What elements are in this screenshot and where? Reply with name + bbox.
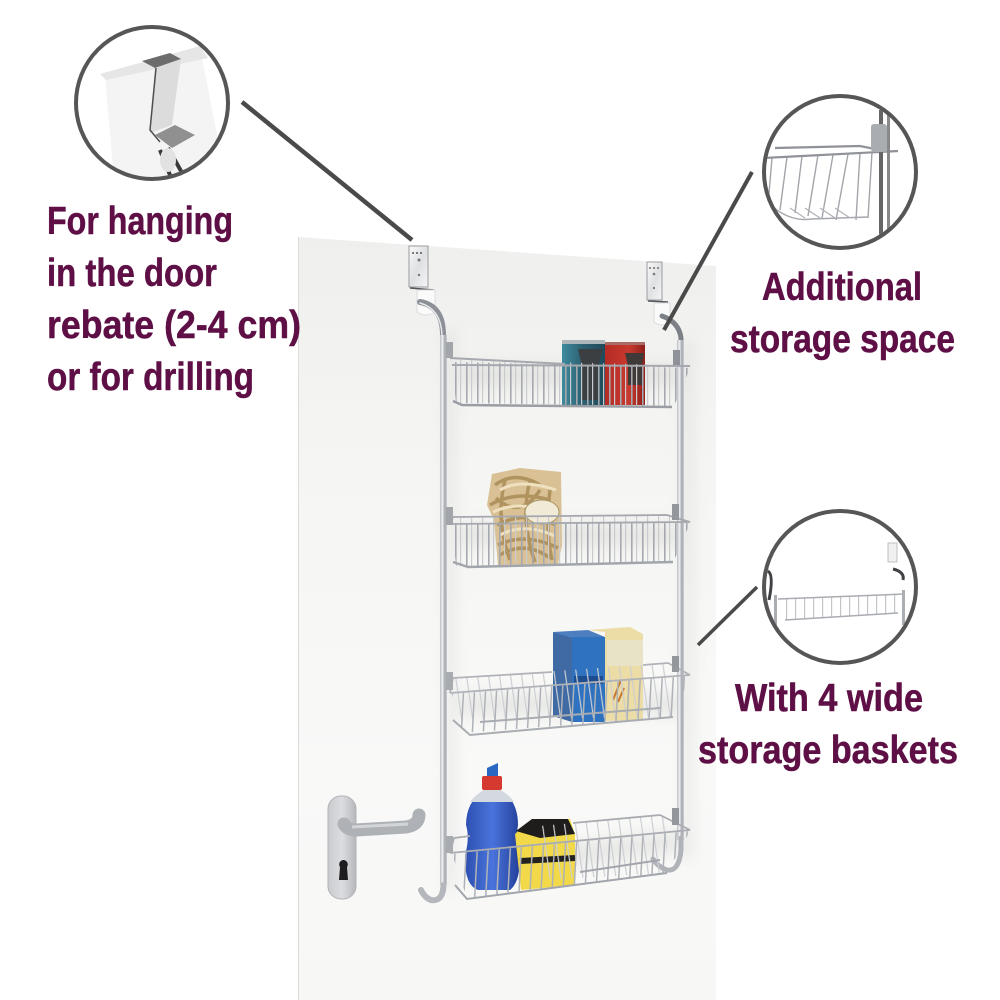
caption: additional storage: storage space bbox=[730, 318, 955, 361]
inset circle: wide basket bbox=[764, 511, 916, 663]
yellow sponge bbox=[515, 819, 575, 890]
caption: hanging: in the door bbox=[47, 252, 217, 295]
caption: additional storage: Additional bbox=[762, 266, 922, 309]
inset circle: door hinge detail bbox=[76, 27, 228, 190]
basket 3 bbox=[446, 656, 690, 735]
right rail bbox=[653, 316, 684, 870]
door handle with keyhole plate bbox=[328, 796, 419, 899]
cans bbox=[562, 340, 645, 405]
caption: hanging: rebate (2-4 cm) bbox=[47, 304, 301, 347]
inset circle: basket close-up bbox=[764, 96, 916, 248]
dish soap bottle bbox=[465, 763, 520, 890]
rack shadow bbox=[450, 330, 688, 890]
basket 4 bbox=[446, 808, 690, 899]
tea boxes bbox=[553, 627, 643, 722]
basket 1 bbox=[446, 342, 690, 407]
door panel bbox=[298, 237, 716, 1000]
caption: four baskets: With 4 wide bbox=[735, 677, 923, 720]
left rail bbox=[420, 302, 447, 900]
caption: hanging: or for drilling bbox=[47, 356, 254, 399]
basket 2 bbox=[446, 504, 690, 567]
caption: hanging bbox=[47, 200, 301, 399]
caption: hanging: For hanging bbox=[47, 200, 233, 243]
left door bracket bbox=[409, 246, 435, 315]
connector arrow: top basket bbox=[664, 172, 752, 330]
connector arrow: hinge bbox=[242, 102, 412, 240]
caption: additional storage bbox=[730, 266, 955, 361]
connector arrow: wide basket bbox=[698, 587, 757, 645]
caption: four baskets bbox=[698, 677, 958, 772]
pasta bag bbox=[487, 468, 562, 565]
right door bracket bbox=[647, 262, 670, 325]
caption: four baskets: storage baskets bbox=[698, 729, 958, 772]
